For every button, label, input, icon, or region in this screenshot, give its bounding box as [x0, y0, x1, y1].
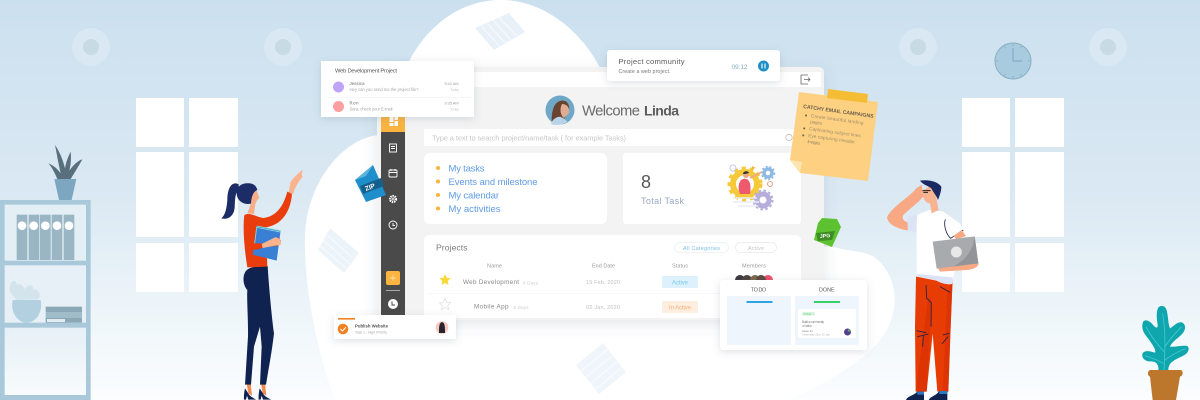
shirt [917, 210, 964, 284]
ponytail [221, 183, 239, 219]
row: mobile app: In Active [669, 306, 692, 312]
panel: task menu: My activities [448, 204, 501, 215]
profile avatar [546, 96, 574, 125]
chat card: Hey can you send me the project file? [350, 87, 419, 92]
welcome heading [582, 102, 679, 120]
glasses [922, 191, 931, 192]
row: web development: Web Development [463, 279, 519, 286]
column: done [795, 296, 859, 345]
arm raised [887, 187, 923, 231]
row: web development: 8 Days [523, 280, 539, 286]
chat card: 9:42 AM [444, 82, 458, 86]
hand on head [915, 185, 923, 196]
icon: document [390, 144, 396, 152]
folder [253, 226, 281, 261]
filter pills: All Categories [683, 246, 720, 252]
icon: dashboard [390, 117, 398, 126]
ceiling lamp right 2 [1089, 0, 1127, 66]
done task card: Asset kit [802, 329, 813, 333]
icon: settings [390, 196, 396, 202]
panel: projects table: Projects [436, 242, 468, 252]
wall clock [995, 43, 1031, 79]
welcome heading: Linda [644, 102, 679, 118]
ceiling lamp right 1 [899, 0, 937, 66]
background blob [305, 0, 895, 400]
table header: End Date [592, 264, 615, 270]
red blouse [244, 192, 292, 267]
row: mobile app: 8 Days [514, 305, 529, 310]
neck and face [921, 185, 939, 213]
table header: Name [487, 264, 502, 270]
add button [386, 271, 400, 285]
ceiling lamp left 2 [264, 0, 302, 66]
panel: projects table [424, 235, 801, 318]
table header: Status [672, 264, 688, 270]
man with laptop [887, 180, 978, 400]
project community timer card [607, 50, 780, 81]
project community timer card: Create a web project. [618, 69, 670, 75]
right window [962, 98, 1064, 292]
ceiling lamp left 1 [72, 0, 110, 66]
project community timer card: Project community [618, 57, 685, 66]
kanban board: TO DO [751, 288, 766, 294]
panel: total task: Total Task [641, 196, 684, 206]
panel: total task: 8 [641, 172, 651, 192]
sticky note: Eye capturing Header [808, 133, 856, 145]
potted plant on shelf [48, 145, 82, 200]
woman with folder [221, 170, 303, 400]
chat card: 9:35 AM [444, 102, 458, 106]
row: web development: 15 Feb, 2020 [586, 280, 620, 286]
faded paper top [475, 13, 525, 50]
sticky note: Captivating subject lines [809, 126, 862, 138]
kanban board: DONE [819, 288, 835, 294]
kanban board [720, 280, 867, 350]
row: mobile app: Mobile App [474, 304, 509, 310]
icon: jpg file [814, 218, 841, 247]
table header [487, 264, 766, 270]
trousers [915, 277, 953, 392]
neck and face [247, 187, 259, 214]
raised hand [289, 170, 303, 194]
ankles [247, 383, 266, 396]
search bar [424, 129, 797, 146]
dashboard window [377, 67, 824, 320]
chat card: Sara, check your E-mail [350, 106, 393, 112]
teal potted plant [1142, 306, 1189, 400]
illustration: person with gears [729, 165, 774, 210]
row: web development [440, 274, 698, 288]
sticky note [790, 89, 878, 181]
row: mobile app: 02 Jan, 2020 [586, 305, 620, 311]
faded paper bottom [576, 343, 626, 394]
sticky note: pages [810, 119, 823, 126]
done task card: Build a community [802, 320, 824, 324]
done task card: Critical [804, 313, 812, 316]
row: mobile app [440, 298, 698, 313]
forearm and hand [245, 237, 281, 250]
icon: logout [801, 75, 810, 84]
shoes [244, 388, 256, 400]
sticky note: Create beautiful landing [811, 113, 864, 126]
forearm under laptop [937, 263, 978, 272]
column: to do [727, 296, 791, 345]
left window [136, 98, 238, 292]
search bar: Type a text to search project/name/task ( for example Tasks) [432, 134, 626, 142]
table header: Members [742, 264, 766, 270]
chat card: Jessica [350, 81, 365, 86]
chat card: Ron [350, 100, 359, 106]
faded paper left [318, 228, 359, 273]
icon: zip file [355, 165, 386, 202]
chat card [321, 61, 474, 117]
welcome heading: Welcome [582, 104, 640, 120]
hair [920, 180, 941, 200]
sticky note: Images [807, 139, 821, 146]
row: web development: Active [672, 280, 689, 286]
panel: task menu: My tasks [448, 164, 485, 174]
publish website task card: Publish Website [355, 324, 389, 328]
icon: zip file: ZIP [364, 182, 377, 193]
chat card: Web Development Project [335, 68, 397, 74]
trousers [243, 266, 274, 385]
sticky note: CATCHY EMAIL CAMPAIGNS [803, 104, 874, 120]
panel: task menu [424, 153, 607, 224]
publish website task card [334, 315, 456, 339]
done task card: of value [802, 324, 812, 328]
laptop [933, 236, 978, 269]
bookshelf [0, 200, 91, 400]
top bar [381, 72, 821, 87]
shoes [906, 392, 924, 400]
icon: history [389, 221, 397, 229]
panel: total task [623, 153, 801, 224]
project community timer card: 09:12 [732, 64, 748, 71]
filter pills [674, 242, 776, 252]
panel: task menu: My calendar [448, 190, 499, 202]
done task card: Yesterday Due 20 Jan [802, 334, 831, 336]
panel: task menu: Events and milestone [448, 177, 538, 188]
publish website task card: Task 1 , High Priority [355, 330, 387, 334]
icon: calendar [389, 169, 397, 177]
member avatars [735, 275, 773, 285]
chat card: Today [450, 108, 459, 112]
user button [388, 299, 398, 309]
sidebar [381, 110, 405, 315]
chat card: Today [450, 88, 459, 92]
filter pills: Active [748, 246, 764, 252]
done task card [798, 309, 856, 338]
icon: jpg file: JPG [820, 233, 831, 240]
